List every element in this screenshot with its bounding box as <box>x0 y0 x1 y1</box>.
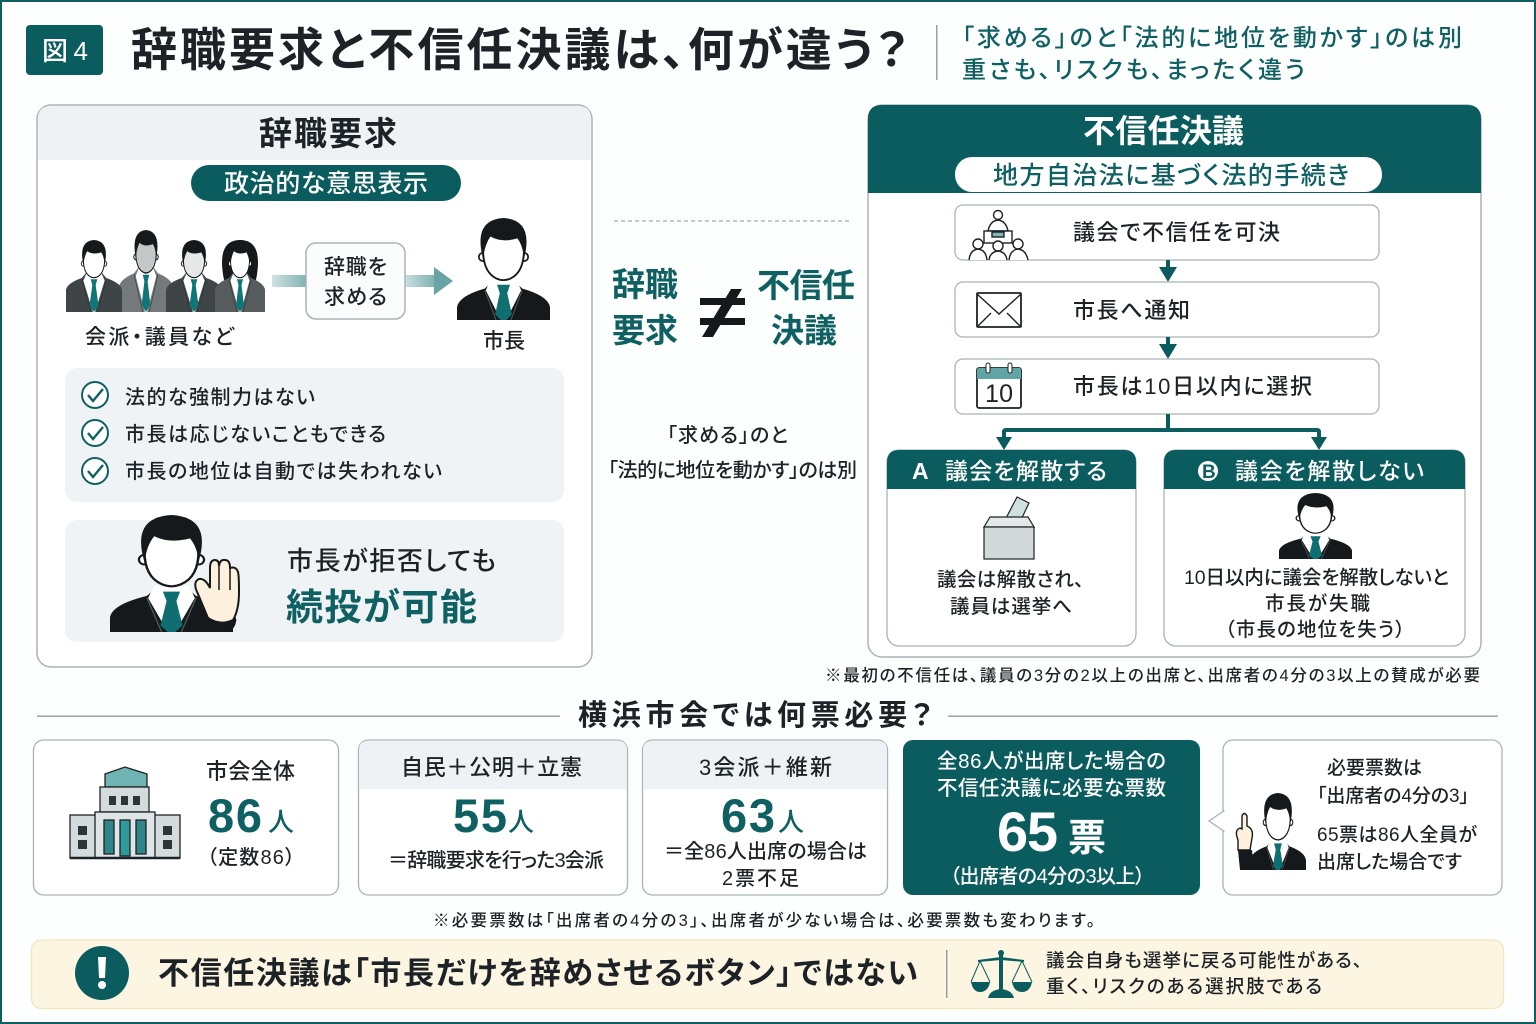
speech bubble: 必要票数は <box>1327 757 1422 779</box>
card: 市会全体 <box>34 740 338 895</box>
callout: 続投が可能: 続投が可能 <box>286 587 477 628</box>
card: 自民+公明+立憲: 人 <box>508 807 534 837</box>
speech bubble: 「出席者の4分の3」 <box>1317 785 1469 807</box>
icon: mayor loses office <box>1279 493 1352 559</box>
step 3 <box>955 359 1379 414</box>
pill: 法的手続き <box>955 157 1382 192</box>
option A <box>887 450 1136 646</box>
banner: 議会自身も選挙に戻る可能性がある、 <box>1046 950 1362 971</box>
footnote: 不信任: ※最初の不信任は、議員の3分の2以上の出席と、出席者の4分の3以上の賛成が必要 <box>825 665 1480 685</box>
step 2 <box>955 282 1379 337</box>
figure badge <box>26 25 103 75</box>
icon: mayor <box>457 218 550 320</box>
card: 市会全体: 市会全体 <box>206 759 295 784</box>
icon: mayor refusing <box>110 515 239 632</box>
not equal sign <box>700 289 745 337</box>
callout: 続投が可能 <box>65 515 564 642</box>
banner: 不信任決議は「市長だけを辞めさせるボタン」ではない <box>158 956 918 991</box>
card: 65票: 不信任決議に必要な票数 <box>937 777 1166 800</box>
title: 辞職要求と不信任決議は、何が違う？ <box>131 24 908 76</box>
card: 市会全体: 人 <box>268 807 294 837</box>
option B: 10日以内に議会を解散しないと <box>1184 567 1449 589</box>
banner: 重く、リスクのある選択肢である <box>1046 976 1322 997</box>
label: 辞職要求: 要求 <box>612 312 678 349</box>
speech bubble: 出席した場合です <box>1317 851 1462 873</box>
step 3: 市長は10日以内に選択 <box>1073 374 1312 399</box>
box: 辞職を求める: 辞職を <box>324 256 387 279</box>
subtitle <box>936 25 1462 84</box>
card: 3会派+維新: 63 <box>721 789 775 842</box>
note: 「求める」のと <box>667 424 788 447</box>
icon: city hall <box>70 767 180 858</box>
pill: 法的手続き: 地方自治法に基づく法的手続き <box>993 162 1349 190</box>
card: 3会派+維新 <box>642 740 888 895</box>
icon: exclamation <box>75 946 129 1000</box>
icon: scales <box>971 950 1032 998</box>
card: 65票: 65 <box>997 800 1058 863</box>
step 1: 議会で不信任を可決 <box>1073 220 1280 245</box>
section heading: 横浜市会では何票必要？ <box>578 699 932 732</box>
card: 65票 <box>903 740 1200 895</box>
arrow: branch <box>996 414 1327 450</box>
center comparison <box>608 221 857 482</box>
check item 2: 市長は応じないこともできる <box>125 423 386 446</box>
arrow <box>1159 260 1177 282</box>
pill: 政治的な意思表示 <box>191 165 461 201</box>
card: 65票: 全86人が出席した場合の <box>937 750 1166 773</box>
icon: calendar <box>977 363 1021 408</box>
header <box>26 24 1462 84</box>
speech bubble: 65票は86人全員が <box>1317 824 1477 846</box>
option A: 議会は解散され、 <box>937 569 1084 591</box>
label: 辞職要求: 辞職 <box>612 266 678 303</box>
card: 自民+公明+立憲: 55 <box>453 789 507 842</box>
label: 不信任決議: 不信任 <box>757 267 855 304</box>
card: 3会派+維新: 2票不足 <box>722 868 799 890</box>
option A: A <box>912 458 929 484</box>
card: 市会全体: （定数86） <box>207 846 295 869</box>
card: 3会派+維新: 人 <box>778 807 804 837</box>
card: 65票: （出席者の4分の3以上） <box>950 865 1145 888</box>
card: 65票: 票 <box>1068 818 1106 860</box>
icon: ballot box <box>984 497 1034 559</box>
panel: 不信任決議 <box>868 105 1481 657</box>
figure badge: 図4 <box>42 36 88 66</box>
card: 自民+公明+立憲 <box>358 740 628 895</box>
label: 会派・議員など: 会派・議員など <box>85 326 235 349</box>
subtitle: 「求める」のと「法的に地位を動かす」のは別 <box>962 25 1462 52</box>
option B: 議会を解散しない <box>1235 458 1424 484</box>
box: 辞職を求める <box>306 243 405 319</box>
icon: calendar: 10 <box>985 380 1013 408</box>
pill: 政治的な意思表示: 政治的な意思表示 <box>224 170 428 198</box>
banner <box>32 940 1504 1008</box>
panel heading: 不信任決議 <box>1083 113 1244 149</box>
note: 「法的に地位を動かす」のは別 <box>608 459 857 482</box>
option B: 市長が失職 <box>1265 593 1370 615</box>
arrow <box>1159 337 1177 359</box>
speech bubble <box>1209 740 1502 895</box>
card: 市会全体: 86 <box>208 789 262 842</box>
icon: council <box>969 210 1028 260</box>
check item 3: 市長の地位は自動では失われない <box>125 460 442 483</box>
icon: group of council members <box>66 230 265 312</box>
callout: 続投が可能: 市長が拒否しても <box>287 546 496 576</box>
check item 1: 法的な強制力はない <box>125 386 315 409</box>
step 2: 市長へ通知 <box>1073 298 1190 323</box>
label: 市長: 市長 <box>483 330 525 353</box>
panel heading: 辞職要求 <box>259 115 397 152</box>
option B: B <box>1202 462 1216 483</box>
icon: person pointing <box>1236 793 1306 870</box>
label: 辞職要求 <box>612 266 678 349</box>
label: 不信任決議: 決議 <box>771 312 837 349</box>
box: 辞職を求める: 求める <box>324 286 387 309</box>
card: 自民+公明+立憲: ＝辞職要求を行った3会派 <box>388 849 604 872</box>
option B <box>1164 450 1465 646</box>
check item 1 <box>82 382 315 409</box>
step 1 <box>955 205 1379 260</box>
icon: envelope <box>977 293 1021 327</box>
panel: 辞職要求 <box>37 105 592 667</box>
footnote: 必要票数: ※必要票数は「出席者の4分の3」、出席者が少ない場合は、必要票数も変わります。 <box>433 910 1095 930</box>
subtitle: 重さも、リスクも、まったく違う <box>962 57 1305 84</box>
card: 3会派+維新: 3会派＋維新 <box>699 755 832 780</box>
card: 自民+公明+立憲: 自民＋公明＋立憲 <box>401 755 582 780</box>
card: 3会派+維新: ＝全86人出席の場合は <box>664 840 867 863</box>
checklist <box>65 368 564 502</box>
arrow: request to mayor <box>272 267 453 295</box>
option A: 議員は選挙へ <box>950 596 1072 618</box>
note <box>608 424 857 482</box>
option A: 議会を解散する <box>945 458 1107 484</box>
label: 不信任決議 <box>757 267 855 349</box>
option B: （市長の地位を失う） <box>1225 619 1405 641</box>
